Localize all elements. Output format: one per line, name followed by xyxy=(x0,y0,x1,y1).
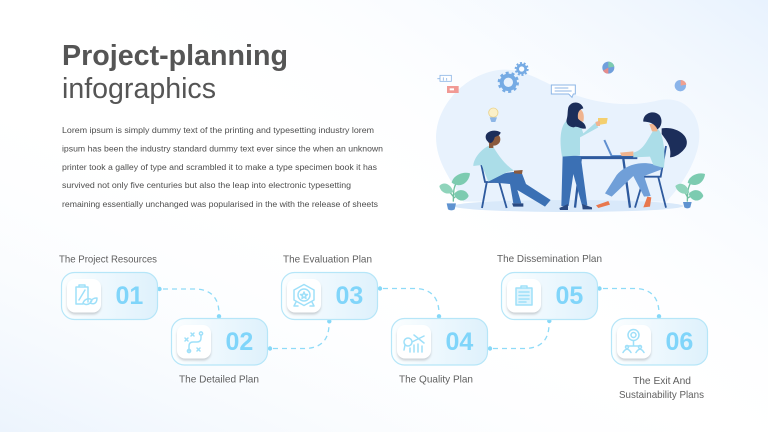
card 01 xyxy=(62,272,158,320)
icon: pie chart xyxy=(602,62,614,74)
number 03: 03 xyxy=(336,282,363,310)
number 05: 05 xyxy=(556,282,583,310)
icon: browser and tag xyxy=(437,75,459,93)
illustration: team planning at a table xyxy=(436,62,705,212)
connector 1 to 2 xyxy=(157,287,221,318)
body text: printer took a galley of type and scrambled it to make a type specimen book it has xyxy=(62,162,377,172)
label 04: The Quality Plan xyxy=(399,374,473,386)
label 06: The Exit And xyxy=(633,375,691,387)
label 06 xyxy=(619,375,704,401)
body text: survived not only five centuries but also the leap into electronic typesetting xyxy=(62,180,351,190)
number 04: 04 xyxy=(446,328,473,356)
number 02: 02 xyxy=(226,328,253,356)
card 05 xyxy=(502,272,598,320)
ground xyxy=(453,200,683,212)
connector 5 to 6 xyxy=(597,286,661,318)
icon: target and people xyxy=(623,330,644,352)
connector 3 to 4 xyxy=(378,286,441,318)
step 06 xyxy=(612,318,708,401)
plant left xyxy=(439,173,470,210)
card 03 xyxy=(282,272,378,320)
table and laptop xyxy=(567,140,637,208)
tile 01 xyxy=(67,279,101,312)
label 06: Sustainability Plans xyxy=(619,389,704,401)
label 01: The Project Resources xyxy=(59,254,157,266)
step 02 xyxy=(172,318,268,386)
tile 04 xyxy=(397,325,431,358)
body text xyxy=(62,125,383,209)
icon: clipboard and leaves xyxy=(76,285,97,304)
label 03: The Evaluation Plan xyxy=(283,254,372,266)
tile 05 xyxy=(507,279,541,312)
icon: checklist clipboard xyxy=(516,286,532,305)
tile 02 xyxy=(177,325,211,358)
body text: ipsum has been the industry standard dummy text ever since the when an unknown xyxy=(62,144,383,154)
icon: route map xyxy=(185,332,203,353)
icon: small pie chart xyxy=(675,80,686,91)
seated woman xyxy=(596,112,687,208)
step 01 xyxy=(59,254,158,320)
label 02: The Detailed Plan xyxy=(179,374,259,386)
number 06: 06 xyxy=(666,328,693,356)
icon: speech bubble xyxy=(551,85,575,97)
number 01: 01 xyxy=(116,282,143,310)
icon: gears xyxy=(499,63,528,92)
tile 03 xyxy=(287,279,321,312)
icon: light bulb xyxy=(489,108,498,122)
step 04 xyxy=(392,318,488,386)
standing woman xyxy=(559,103,608,210)
card 04 xyxy=(392,318,488,365)
illustration background blob xyxy=(436,70,699,202)
card 06 xyxy=(612,318,708,365)
label 05: The Dissemination Plan xyxy=(497,253,602,265)
card 02 xyxy=(172,318,268,365)
icon: magnifier and bars xyxy=(404,335,424,352)
connector 2 to 3 xyxy=(268,319,331,351)
step 03 xyxy=(282,254,378,320)
connector 4 to 5 xyxy=(488,319,552,351)
body text: Lorem ipsum is simply dummy text of the printing and typesetting industry lorem xyxy=(62,125,374,135)
title: infographics xyxy=(62,73,216,105)
icon: award badge xyxy=(294,284,314,306)
title: Project-planning xyxy=(62,40,288,72)
step 05 xyxy=(497,253,602,320)
tile 06 xyxy=(617,325,651,358)
seated man xyxy=(473,131,551,208)
plant right xyxy=(675,173,705,208)
body text: remaining essentially unchanged was popularised in the with the release of sheets xyxy=(62,199,378,209)
title xyxy=(62,40,288,105)
